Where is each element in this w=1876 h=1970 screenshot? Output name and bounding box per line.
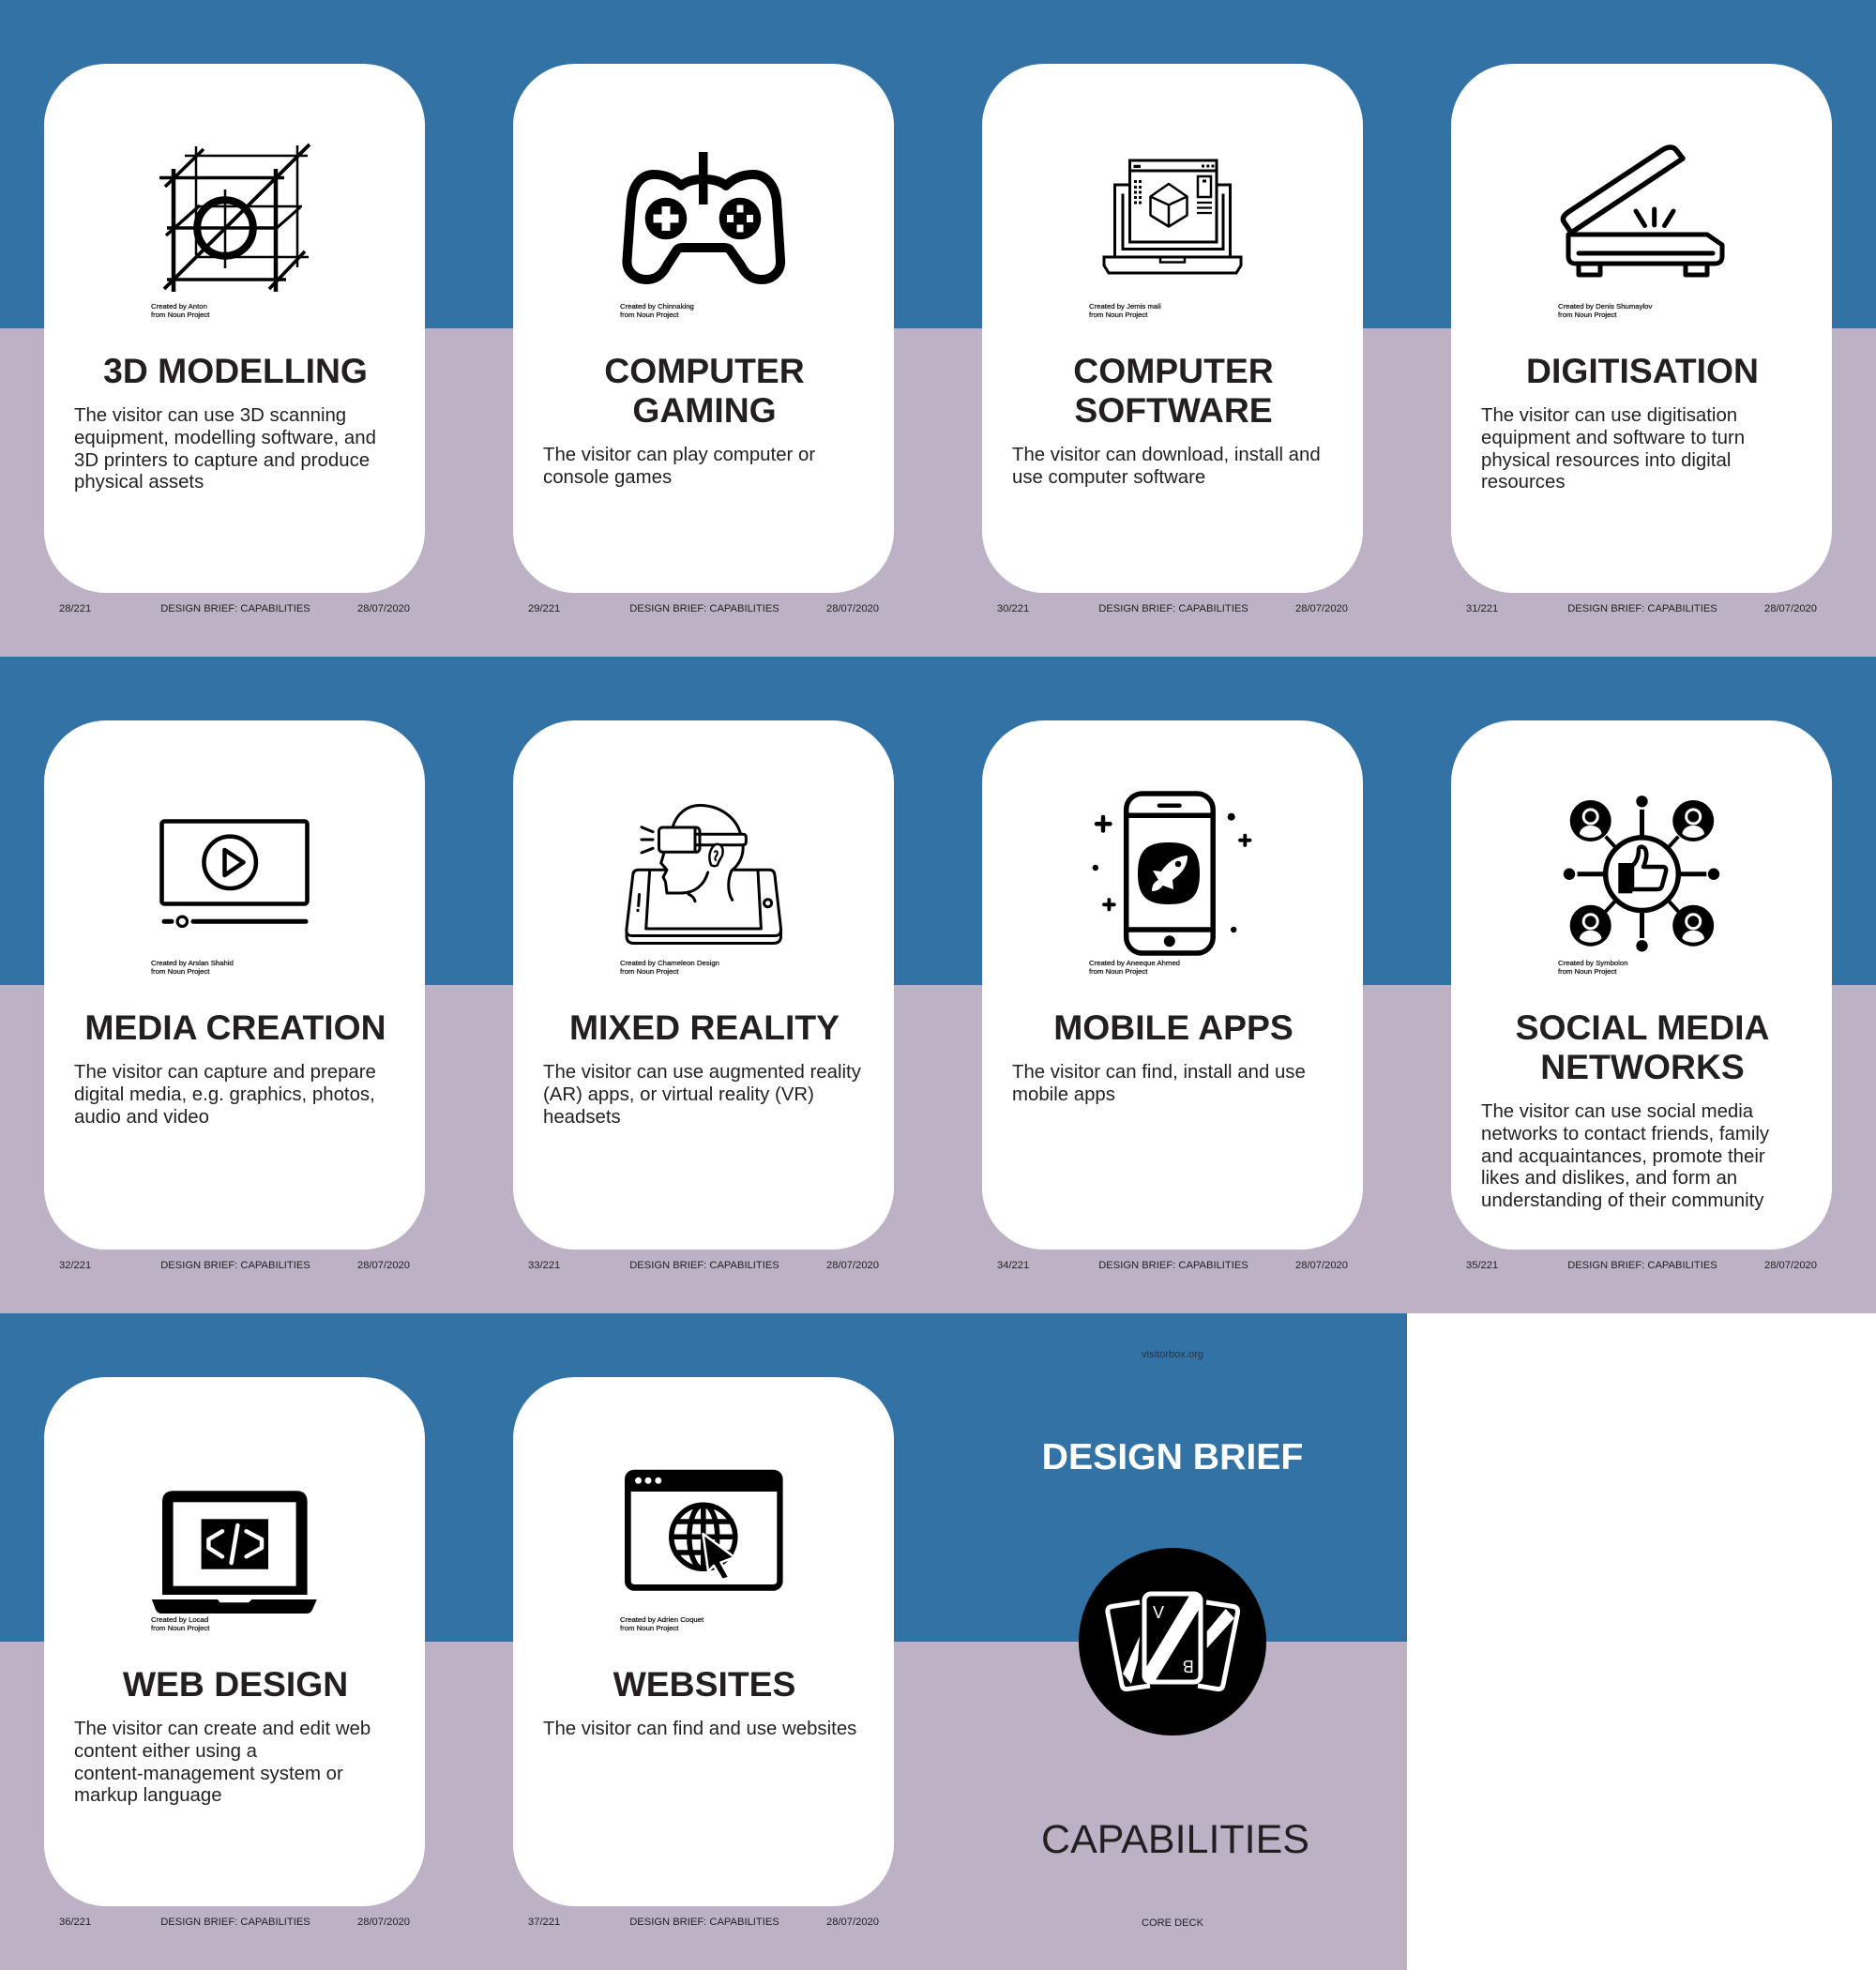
website label: visitorbox.org <box>1142 1349 1203 1360</box>
icon credit: Created by Adrien Coquet <box>620 1615 704 1624</box>
icon credit: from Noun Project <box>151 310 209 319</box>
footer: 33/221 <box>528 1260 560 1271</box>
description <box>1481 1101 1769 1211</box>
description <box>1012 1062 1306 1105</box>
icon credit <box>1557 959 1628 976</box>
card <box>513 1377 894 1906</box>
card <box>513 64 894 593</box>
footer: 31/221 <box>1466 603 1498 614</box>
icon credit <box>620 1616 733 1632</box>
panel: web design <box>0 1313 469 1970</box>
footer: 28/07/2020 <box>826 603 879 614</box>
description: The visitor can use augmented reality <box>543 1062 861 1083</box>
footer: 28/07/2020 <box>357 1260 410 1271</box>
icon credit: Created by Symbolon <box>1558 959 1628 967</box>
panel: mobile apps <box>938 657 1407 1313</box>
footer: DESIGN BRIEF: CAPABILITIES <box>1567 1260 1717 1271</box>
footer: DESIGN BRIEF: CAPABILITIES <box>1098 603 1248 614</box>
icon credit: Created by Denis Shumaylov <box>1558 302 1652 311</box>
card <box>982 64 1363 593</box>
card <box>982 720 1363 1250</box>
icon credit: Created by Jemis mali <box>1089 302 1161 311</box>
description: equipment, modelling software, and <box>74 428 376 448</box>
footer <box>997 603 1348 614</box>
footer <box>528 603 879 614</box>
icon credit <box>150 959 234 976</box>
footer: 28/07/2020 <box>826 1917 879 1928</box>
description: The visitor can download, install and <box>1012 445 1321 465</box>
icon: laptop with code <box>152 1491 317 1614</box>
footer: DESIGN BRIEF: CAPABILITIES <box>629 603 779 614</box>
icon credit: Created by Anton <box>151 302 207 311</box>
cover subtitle: CAPABILITIES <box>1041 1817 1309 1862</box>
description: The visitor can create and edit web <box>74 1719 371 1739</box>
description: resources <box>1481 472 1566 492</box>
footer <box>59 603 410 614</box>
footer: 30/221 <box>997 603 1029 614</box>
footer: 37/221 <box>528 1917 560 1928</box>
description: physical resources into digital <box>1481 450 1731 471</box>
description <box>1012 445 1321 488</box>
heading: MOBILE APPS <box>1053 1008 1294 1047</box>
panel: social media networks <box>1407 657 1876 1313</box>
card <box>1451 64 1832 593</box>
panel: digitisation <box>1407 0 1876 657</box>
icon: VR headset over phone <box>625 804 782 945</box>
icon credit <box>1557 302 1653 319</box>
deck label: CORE DECK <box>1142 1917 1203 1929</box>
heading: GAMING <box>632 390 777 430</box>
description: headsets <box>543 1107 621 1128</box>
card <box>44 1377 425 1906</box>
icon credit: from Noun Project <box>620 1623 678 1632</box>
heading: DIGITISATION <box>1526 351 1759 390</box>
footer: 28/221 <box>59 603 91 614</box>
heading: NETWORKS <box>1540 1047 1745 1086</box>
description: The visitor can use 3D scanning <box>74 405 346 426</box>
footer <box>997 1260 1348 1271</box>
icon credit: Created by Aneeque Ahmed <box>1089 959 1180 967</box>
panel: media creation <box>0 657 469 1313</box>
footer: DESIGN BRIEF: CAPABILITIES <box>160 1260 310 1271</box>
heading <box>1073 351 1274 430</box>
footer <box>528 1260 879 1271</box>
description: use computer software <box>1012 467 1205 488</box>
footer: 28/07/2020 <box>1295 1260 1348 1271</box>
description <box>543 1062 861 1128</box>
icon credit <box>619 959 719 976</box>
description: physical assets <box>74 472 204 492</box>
description: The visitor can find, install and use <box>1012 1062 1306 1083</box>
icon credit: Created by Locad <box>151 1615 208 1624</box>
description: 3D printers to capture and produce <box>74 450 370 471</box>
footer: 28/07/2020 <box>357 603 410 614</box>
icon credit: Created by Chameleon Design <box>620 959 719 967</box>
description: The visitor can capture and prepare <box>74 1062 376 1083</box>
panel: computer gaming <box>469 0 938 657</box>
footer: 34/221 <box>997 1260 1029 1271</box>
icon credit: Created by Chinnaking <box>620 302 694 311</box>
footer: DESIGN BRIEF: CAPABILITIES <box>629 1260 779 1271</box>
icon credit <box>1088 302 1161 319</box>
icon: flatbed scanner <box>1561 144 1724 278</box>
icon: smartphone with rocket app <box>1092 791 1251 956</box>
footer: DESIGN BRIEF: CAPABILITIES <box>629 1917 779 1928</box>
description <box>74 405 376 492</box>
icon: browser with globe and cursor <box>625 1469 783 1591</box>
footer <box>1466 603 1817 614</box>
panel: mixed reality <box>469 657 938 1313</box>
footer <box>528 1916 879 1929</box>
footer: 28/07/2020 <box>357 1917 410 1928</box>
description: console games <box>543 467 672 488</box>
logo: cards in black circle: B <box>1183 1657 1194 1675</box>
panel: cover <box>938 1313 1407 1970</box>
heading <box>1516 1008 1769 1086</box>
footer: DESIGN BRIEF: CAPABILITIES <box>160 1917 310 1928</box>
description: understanding of their community <box>1481 1190 1763 1211</box>
card <box>44 720 425 1250</box>
icon credit: from Noun Project <box>1558 966 1616 976</box>
icon credit: from Noun Project <box>1089 966 1147 976</box>
heading <box>604 351 805 430</box>
footer: 32/221 <box>59 1260 91 1271</box>
footer: 28/07/2020 <box>826 1260 879 1271</box>
icon: video player <box>159 819 310 929</box>
cover heading: DESIGN BRIEF <box>1042 1437 1303 1478</box>
description: content-management system or <box>74 1764 343 1784</box>
heading: COMPUTER <box>1073 351 1274 390</box>
description: mobile apps <box>1012 1084 1115 1105</box>
description: digital media, e.g. graphics, photos, <box>74 1084 375 1105</box>
panel: websites <box>469 1313 938 1970</box>
description: and acquaintances, promote their <box>1481 1146 1765 1167</box>
description <box>74 1062 376 1128</box>
footer: DESIGN BRIEF: CAPABILITIES <box>1098 1260 1248 1271</box>
footer: 36/221 <box>59 1917 91 1928</box>
footer: DESIGN BRIEF: CAPABILITIES <box>1567 603 1717 614</box>
heading: WEB DESIGN <box>123 1664 348 1704</box>
description <box>74 1719 371 1806</box>
heading: SOFTWARE <box>1074 390 1273 430</box>
icon credit <box>150 302 210 319</box>
description: audio and video <box>74 1107 209 1128</box>
icon credit: from Noun Project <box>151 966 209 976</box>
logo: cards in black circle: V <box>1153 1603 1164 1622</box>
panel: computer software <box>938 0 1407 657</box>
icon: 3D wireframe cube <box>159 143 311 292</box>
footer: 28/07/2020 <box>1295 603 1348 614</box>
description: (AR) apps, or virtual reality (VR) <box>543 1084 814 1105</box>
description <box>1481 405 1745 492</box>
description: equipment and software to turn <box>1481 428 1745 448</box>
card <box>44 64 425 593</box>
description: The visitor can find and use websites <box>543 1719 856 1739</box>
icon credit: from Noun Project <box>151 1623 209 1632</box>
description: likes and dislikes, and form an <box>1481 1168 1737 1189</box>
description: The visitor can use digitisation <box>1481 405 1737 426</box>
footer: 29/221 <box>528 603 560 614</box>
card <box>1451 720 1832 1250</box>
description: markup language <box>74 1785 222 1806</box>
description: networks to contact friends, family <box>1481 1124 1769 1144</box>
icon: social network thumbs up <box>1563 796 1720 951</box>
icon credit: from Noun Project <box>620 310 678 319</box>
icon credit <box>150 1615 210 1632</box>
icon credit: from Noun Project <box>1089 310 1147 319</box>
footer: 35/221 <box>1466 1260 1498 1271</box>
icon credit <box>1088 959 1180 976</box>
icon credit <box>619 302 694 319</box>
heading: 3D MODELLING <box>103 351 368 390</box>
icon credit: from Noun Project <box>620 966 678 976</box>
description: content either using a <box>74 1741 257 1762</box>
description: The visitor can play computer or <box>543 445 815 465</box>
footer: 28/07/2020 <box>1764 603 1817 614</box>
icon: laptop with software window <box>1103 159 1242 274</box>
heading: COMPUTER <box>604 351 805 390</box>
logo: cards in black circle <box>1079 1548 1266 1735</box>
heading: WEBSITES <box>613 1664 795 1704</box>
footer <box>1466 1260 1817 1271</box>
card <box>513 720 894 1250</box>
footer: 28/07/2020 <box>1764 1260 1817 1271</box>
icon credit: Created by Arslan Shahid <box>151 959 234 967</box>
heading: MEDIA CREATION <box>84 1008 386 1047</box>
footer <box>59 1917 410 1928</box>
description <box>543 445 815 488</box>
description: The visitor can use social media <box>1481 1101 1753 1122</box>
heading: MIXED REALITY <box>569 1008 840 1047</box>
footer <box>59 1260 410 1271</box>
heading: SOCIAL MEDIA <box>1516 1008 1769 1047</box>
panel: 3D modelling <box>0 0 469 657</box>
footer: DESIGN BRIEF: CAPABILITIES <box>160 603 310 614</box>
icon: game controller <box>622 152 786 284</box>
icon credit: from Noun Project <box>1558 310 1616 319</box>
